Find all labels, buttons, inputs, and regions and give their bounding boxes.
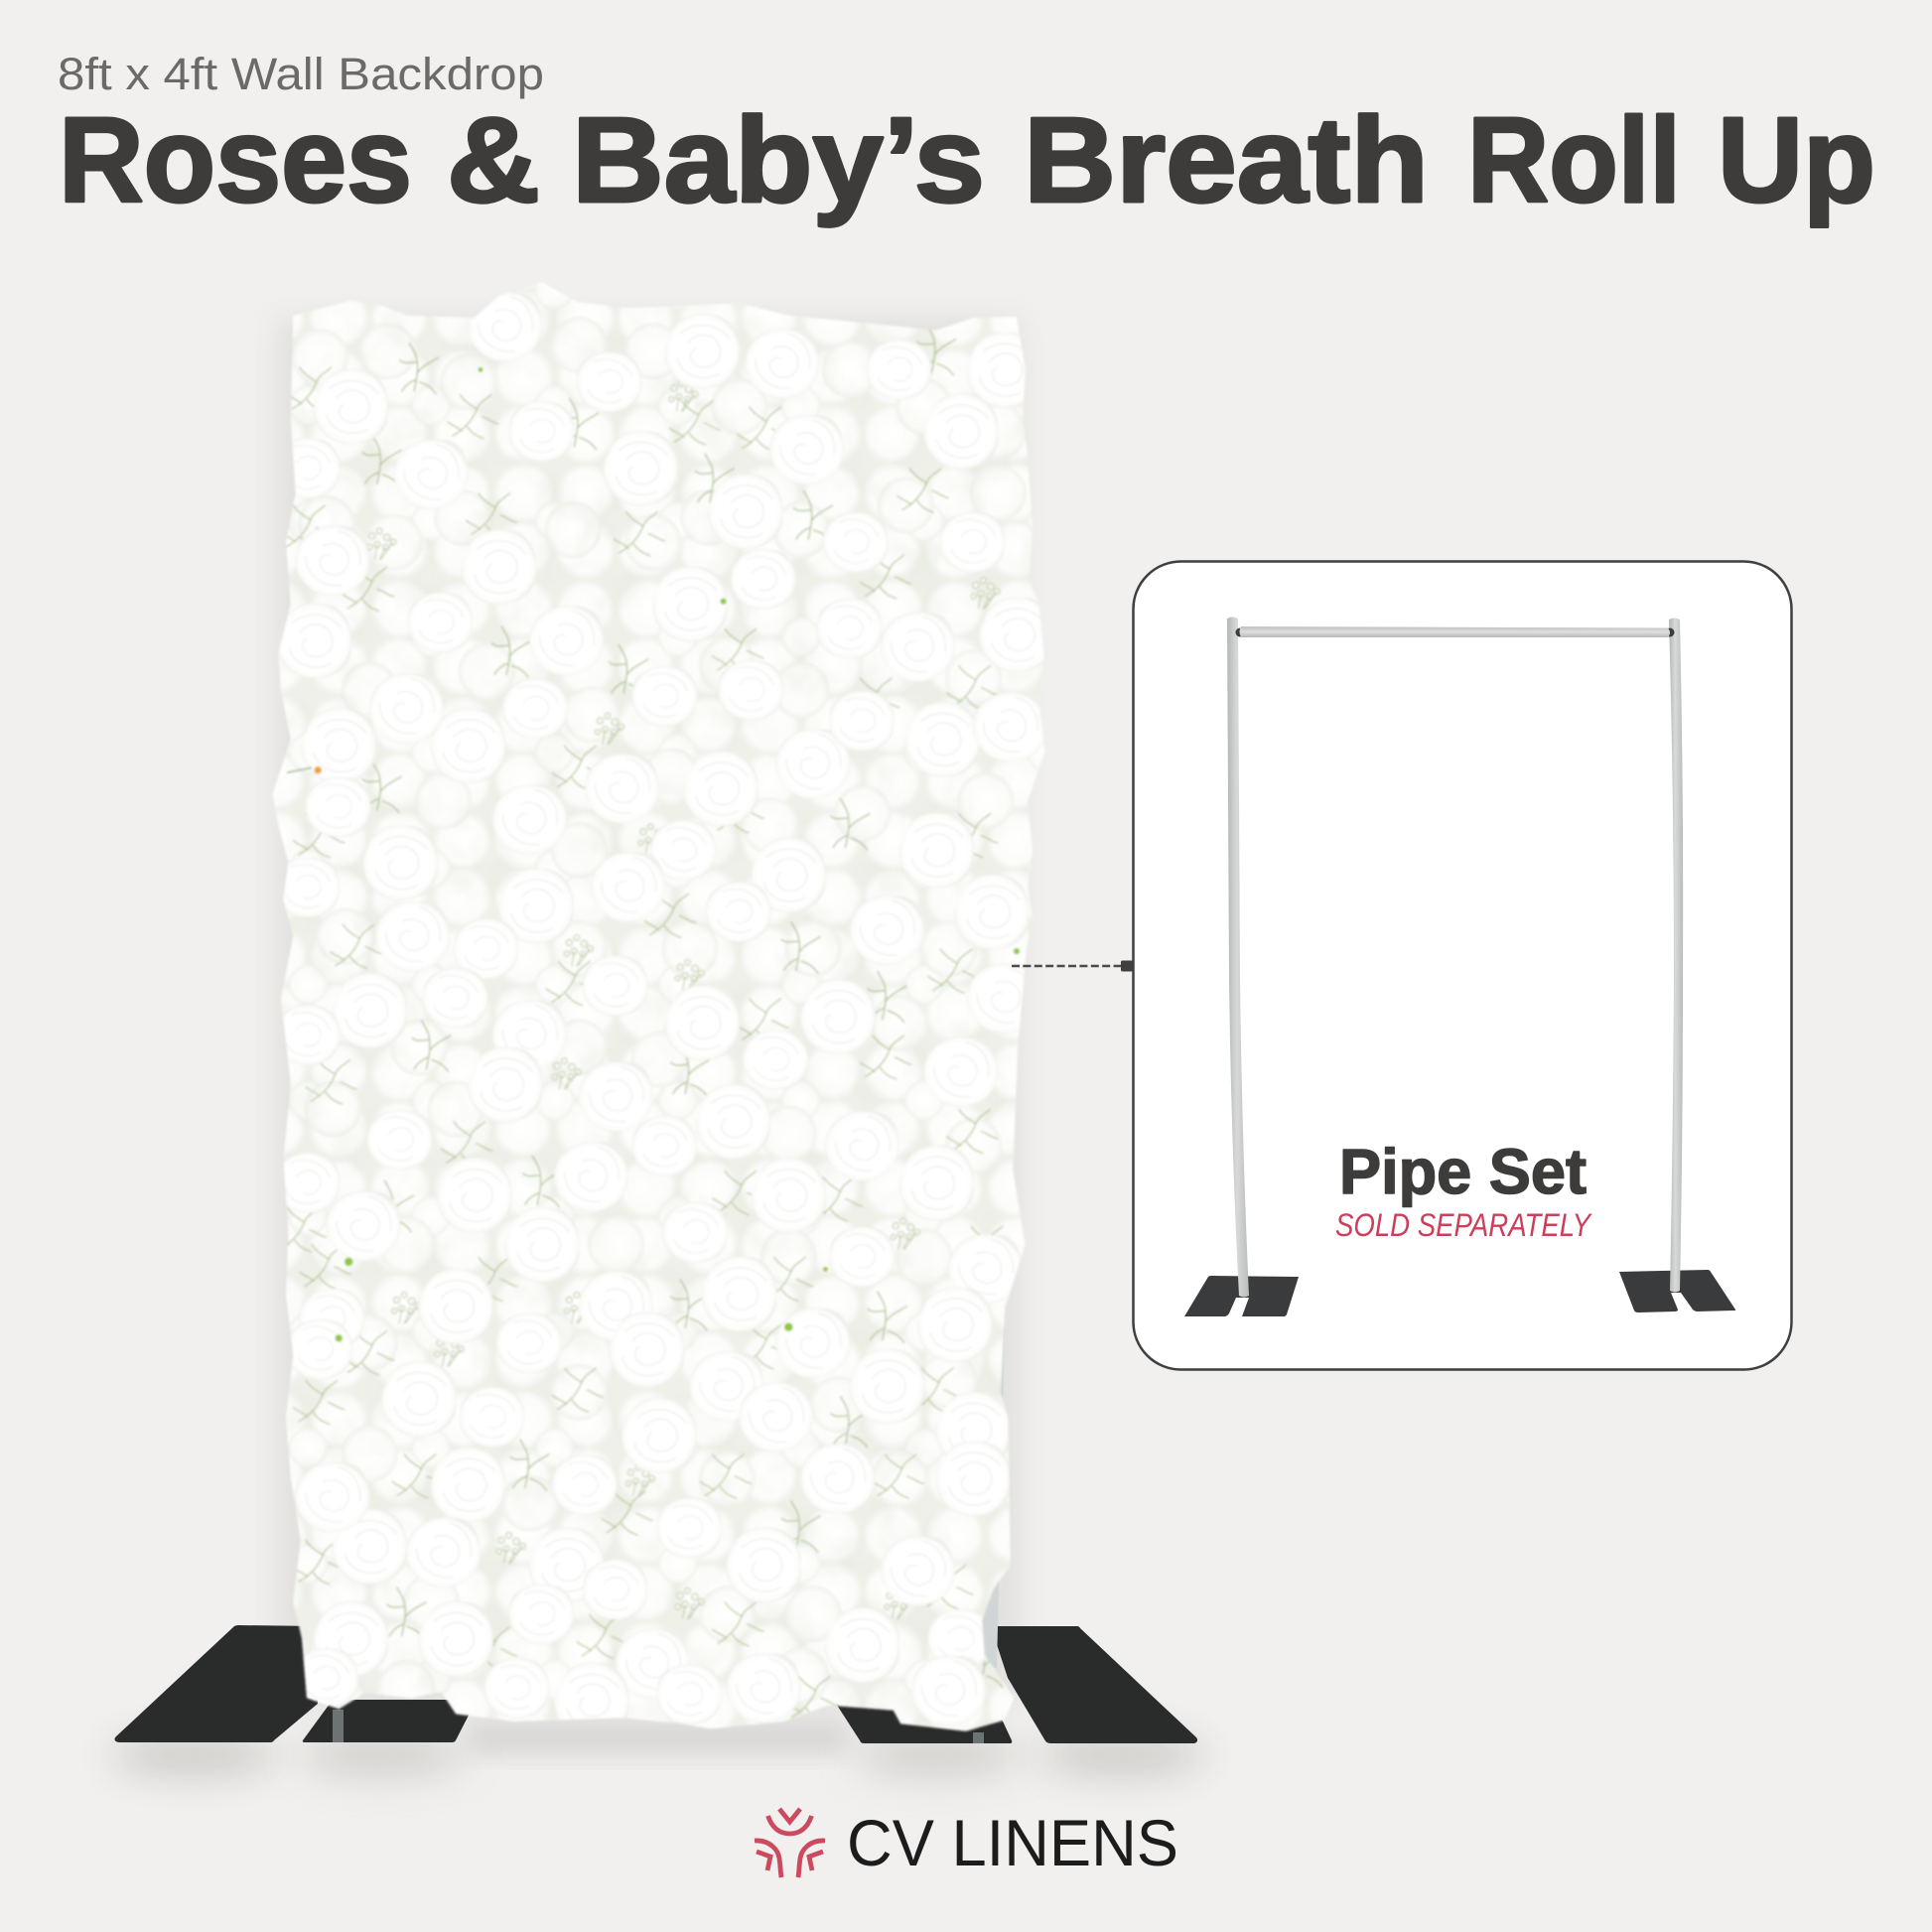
sold separately note: SOLD SEPARATELY	[1335, 1207, 1592, 1243]
panel: pipe set	[1134, 562, 1791, 1370]
title: Breath	[1024, 92, 1429, 227]
wall and floor shadows	[109, 318, 1206, 1775]
dashed connector from wall to pipe set	[1012, 961, 1133, 971]
title: &	[447, 92, 540, 227]
title: Roses	[59, 92, 412, 227]
left upright	[1227, 618, 1249, 1297]
orange bud at left edge	[287, 766, 322, 773]
pipe stand base left	[1184, 1276, 1299, 1316]
pipe stand base right	[1619, 1270, 1735, 1312]
subtitle: 8ft x 4ft Wall Backdrop	[58, 49, 544, 99]
support pipes visible behind the wall	[333, 1291, 1006, 1743]
gypsophila stems and baby's breath	[275, 324, 1011, 1721]
white roses layer	[275, 292, 1053, 1738]
green leaf accents	[336, 367, 1020, 1342]
pipe set label: Pipe Set	[1339, 1136, 1587, 1207]
title: Baby’s	[572, 92, 985, 227]
title: Roll	[1467, 92, 1681, 227]
flower wall	[265, 277, 1053, 1743]
mottled shading	[284, 316, 971, 1714]
logo mark	[755, 1809, 825, 1877]
right upright	[1669, 618, 1683, 1293]
base plates of the wall stand	[115, 1625, 1197, 1743]
horizontal crossbar	[1235, 626, 1674, 637]
title	[59, 92, 1875, 227]
logo	[755, 1806, 1178, 1879]
title: Up	[1718, 92, 1875, 227]
background blooms layer	[292, 317, 1027, 1717]
logo wordmark: CV LINENS	[847, 1806, 1178, 1879]
